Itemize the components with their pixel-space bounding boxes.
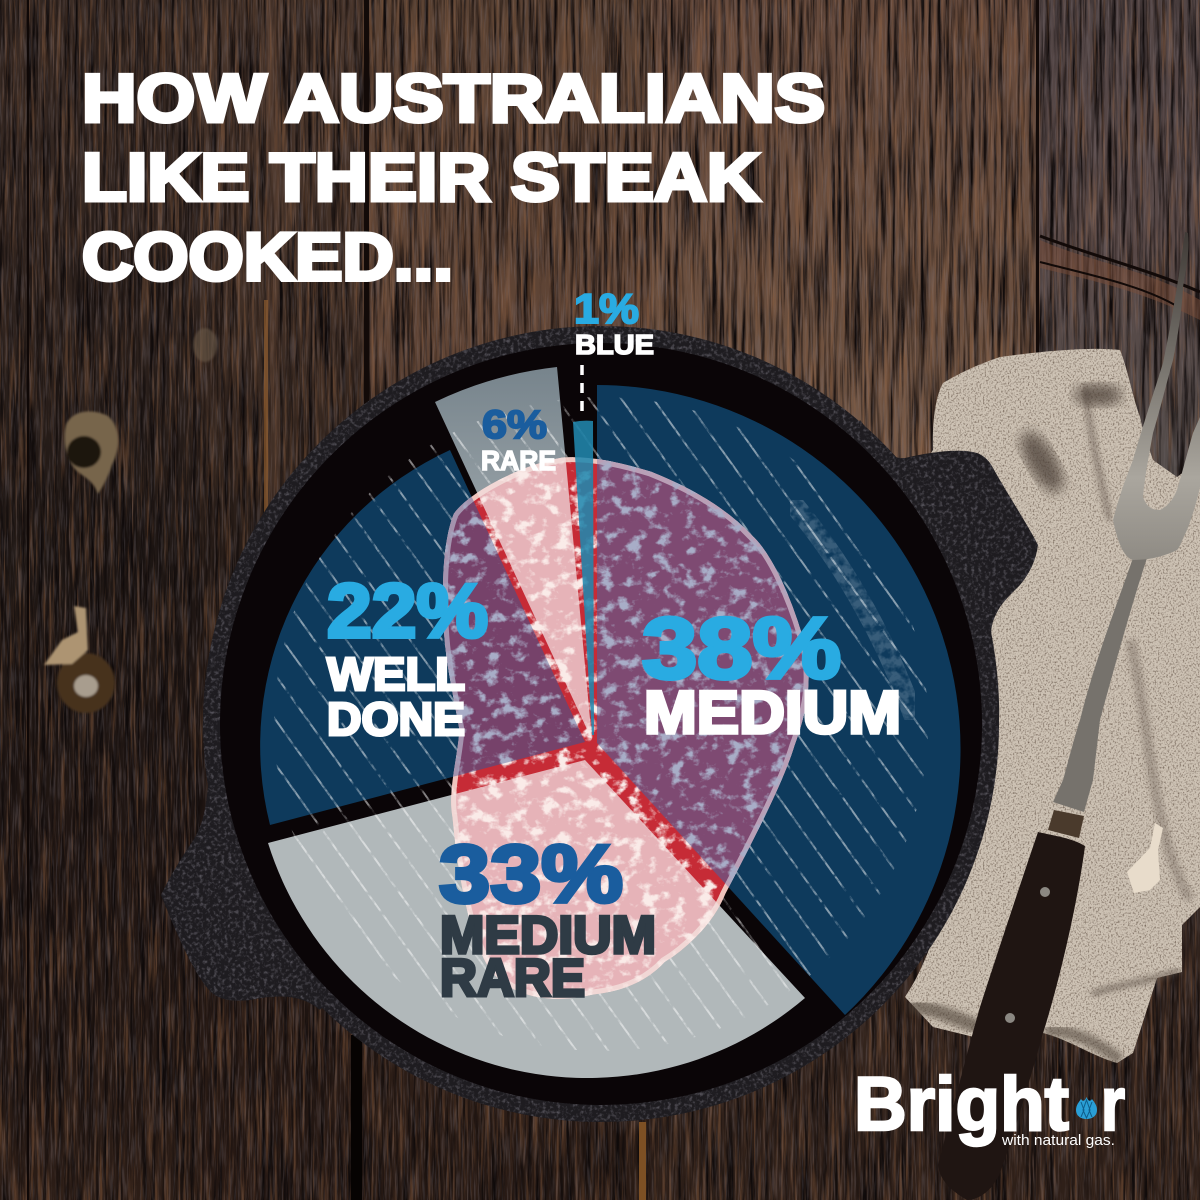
steak base, red in gaps between slices [445,460,806,996]
fork head and tines [1113,232,1200,560]
label: 38% medium [642,601,901,746]
slice: rare 6% [435,367,592,740]
fork rivet upper [1040,887,1050,897]
label: 38% medium: 38% [642,601,841,697]
label: 33% medium rare: MEDIUM [440,906,656,965]
label: 6% rare: RARE [481,445,556,476]
slice: blue 1% [573,421,594,735]
label: 33% medium rare: RARE [440,949,585,1008]
label: 1% blue: 1% [574,285,639,332]
steak seen through rare slice [477,457,592,740]
steak seen through well done slice [443,496,585,777]
grill lines on pan surface [274,397,928,1051]
linen towel [900,349,1200,1063]
label: 6% rare [481,403,556,476]
steak seen through medium rare slice [451,760,720,999]
label: 33% medium rare [439,829,656,1008]
fork stem [1053,558,1147,812]
title: LIKE THEIR STEAK [82,140,760,216]
icon: gas flame droplets [1076,1097,1097,1119]
label: 1% blue: BLUE [575,329,654,360]
logo: Brighter with natural gas: Bright [854,1062,1069,1147]
label: 22% well done: DONE [327,693,465,745]
dashed leader for blue slice [580,365,584,416]
pie chart with steak [260,367,961,1078]
label: 22% well done [327,569,488,745]
label: 22% well done: WELL [327,648,465,700]
logo: Brighter with natural gas: r [1101,1062,1125,1147]
bone chip on towel [1127,823,1163,893]
fork handle [938,832,1085,1200]
slice: medium 38% [597,385,961,1015]
title: HOW AUSTRALIANS [82,60,825,136]
logo: Brighter with natural gas: with natural gas. [1001,1132,1115,1149]
knot in wood, upper [64,411,118,494]
label: 38% medium: MEDIUM [644,679,901,746]
fork neck [1048,810,1084,838]
slice: well done 22% [260,450,585,825]
fork rivet lower [1005,1013,1015,1023]
pan inner surface [220,343,982,1105]
label: 1% blue [574,285,654,360]
pan rim and handles [161,326,1038,1122]
worn patch on wood [193,328,217,362]
slice: medium rare 33% [268,760,805,1078]
steak seen through medium slice [597,459,809,888]
knot in wood, lower [44,606,115,713]
label: 6% rare: 6% [482,403,547,447]
title: COOKED... [82,219,453,295]
label: 22% well done: 22% [327,569,488,654]
title [82,60,825,295]
label: 33% medium rare: 33% [439,829,623,920]
cast iron pan [161,326,1038,1122]
carving fork [938,232,1200,1200]
